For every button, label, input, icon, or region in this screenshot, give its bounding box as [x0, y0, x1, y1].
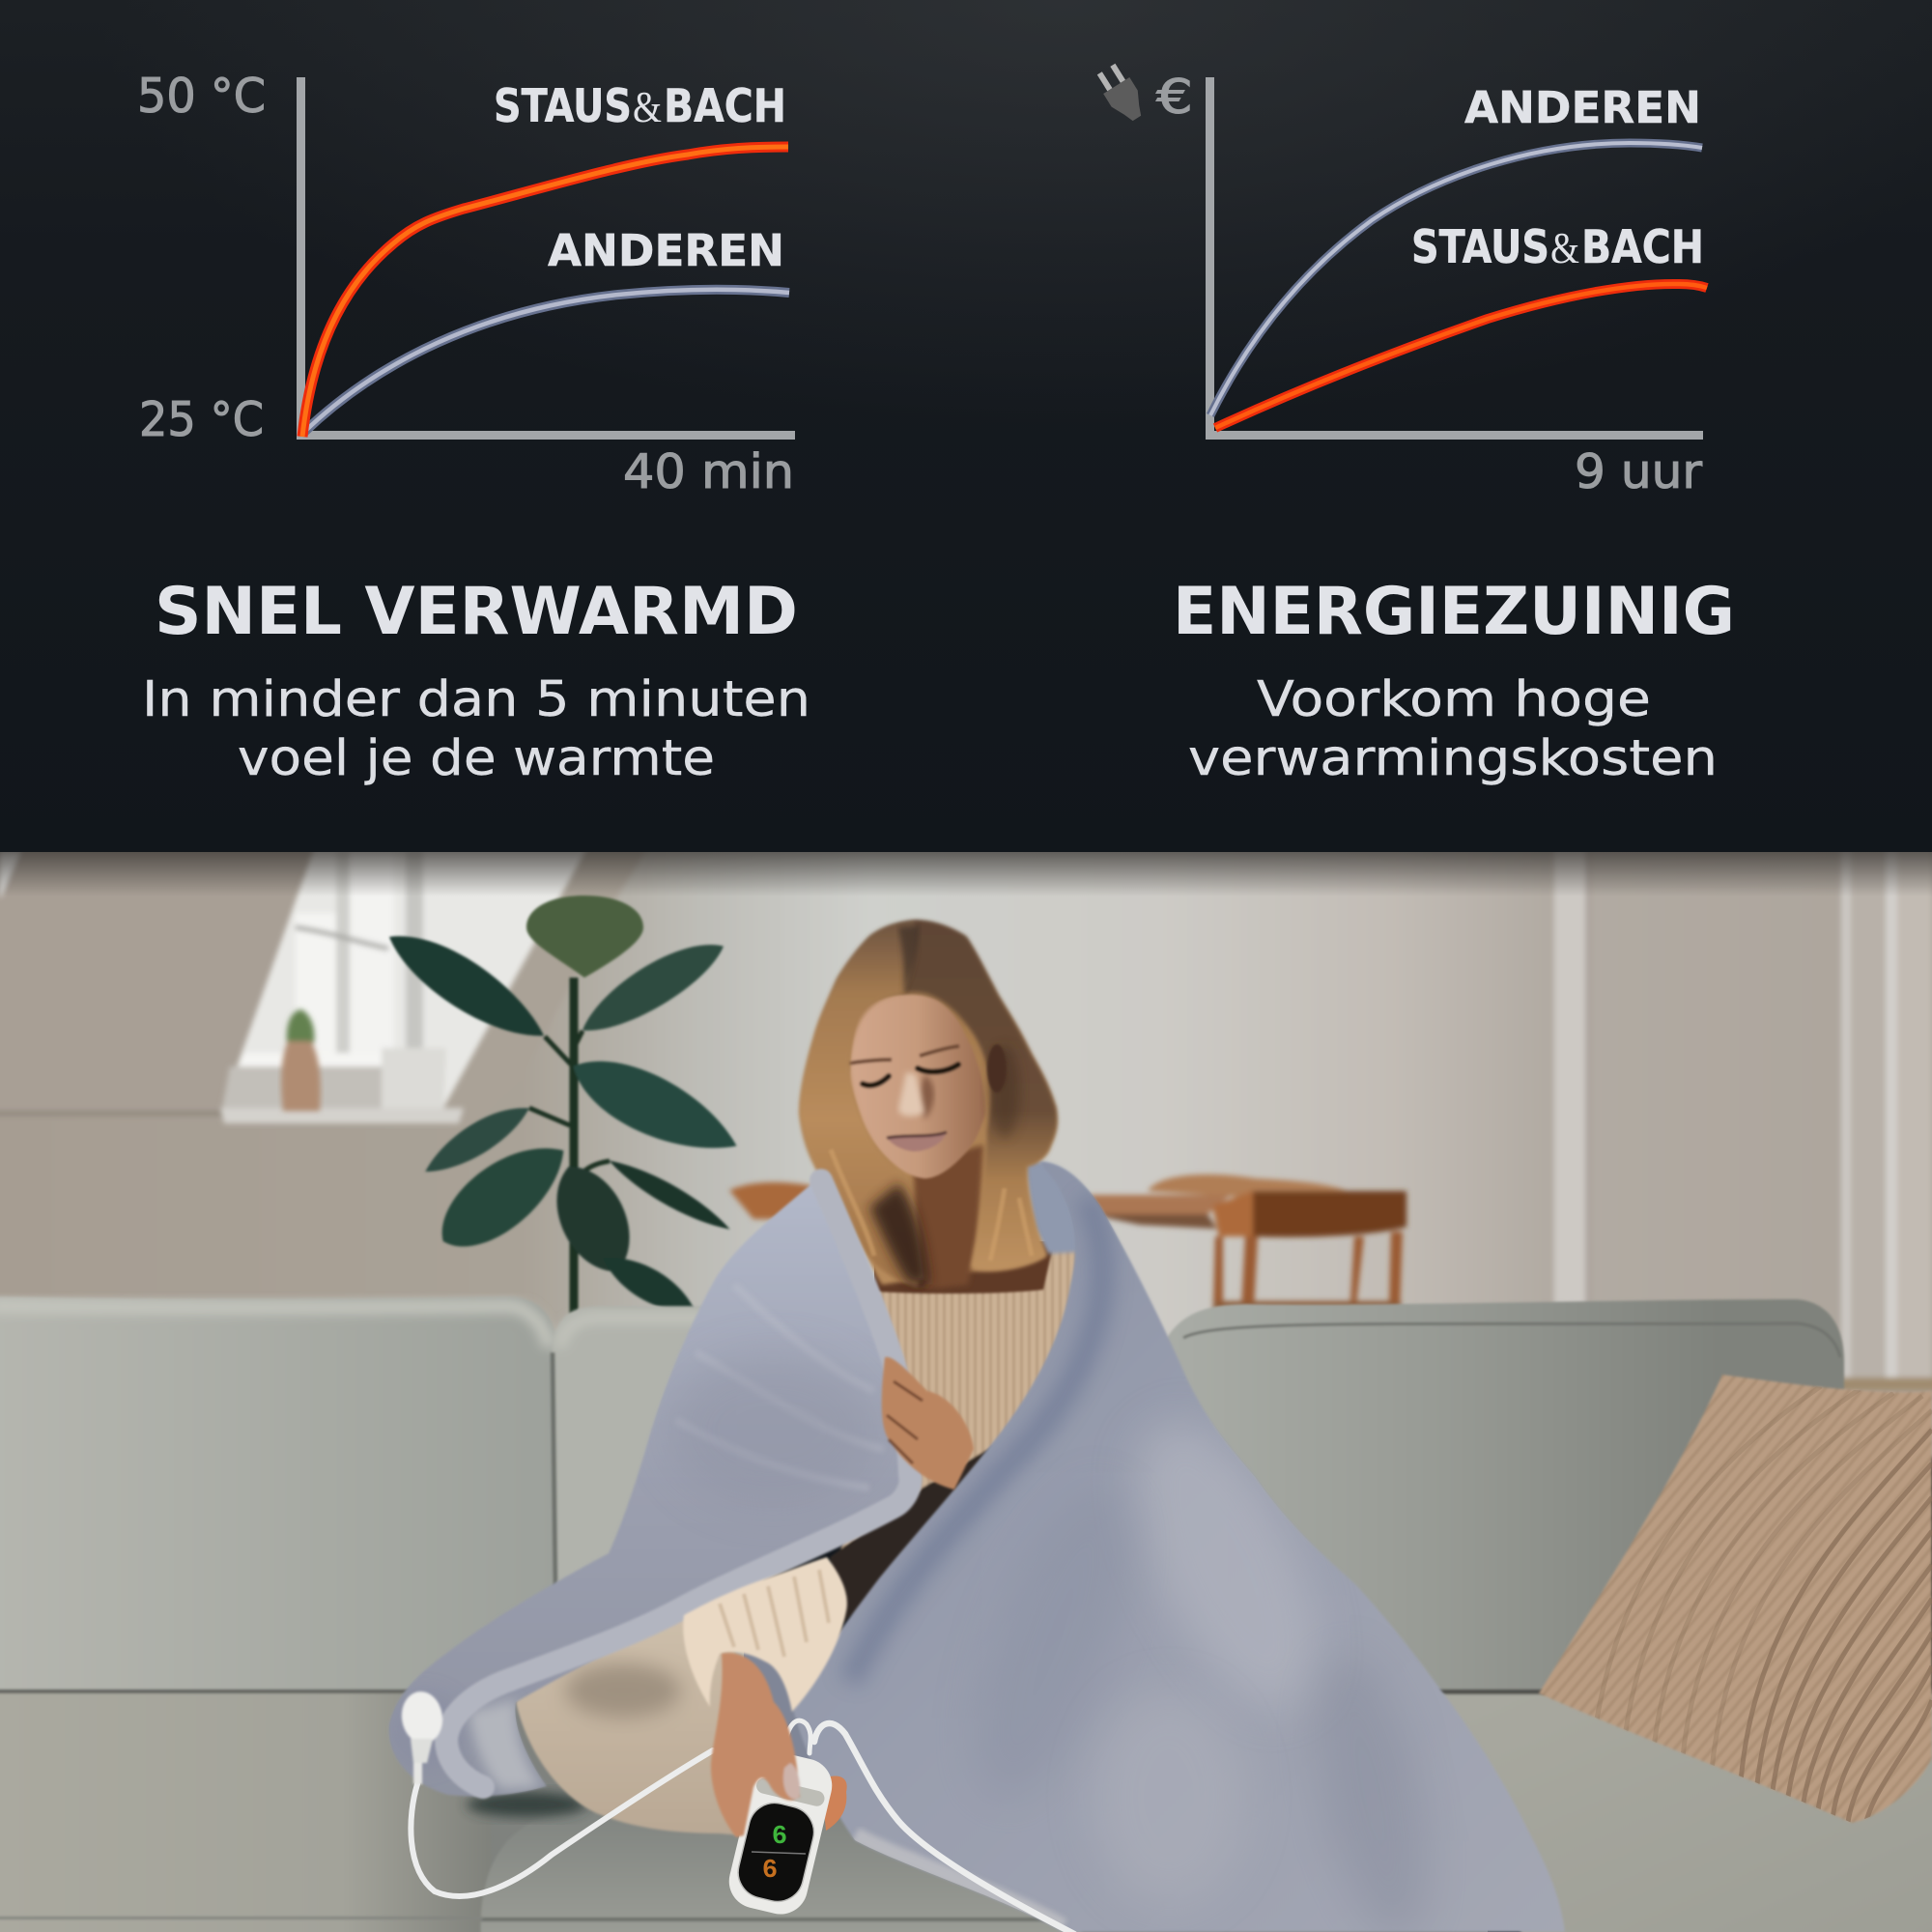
label: Anderen: ANDEREN	[1464, 82, 1701, 133]
cables	[411, 1720, 1074, 1932]
blanket connector	[398, 1689, 446, 1784]
x-axis label: 40 min	[623, 444, 794, 499]
face	[848, 994, 985, 1179]
label: Staus&Bach: BACH	[664, 80, 786, 133]
hand holding blanket	[882, 1357, 974, 1490]
room wall	[0, 840, 1932, 1459]
shadow under legs	[467, 1792, 586, 1817]
pillow	[1539, 1375, 1932, 1835]
blanket trim	[446, 1180, 911, 1787]
leaf: bottom	[595, 1244, 703, 1325]
hair shadows and highlights	[831, 925, 1032, 1285]
line: Anderen	[1210, 143, 1702, 415]
ear and hair shadow	[987, 1044, 1020, 1138]
axes	[297, 77, 795, 440]
text: heating description	[142, 671, 810, 787]
line: Anderen	[303, 290, 789, 433]
sofa base behind cushions	[464, 1671, 1488, 1932]
hand on remote	[711, 1653, 800, 1837]
line: Staus&Bach	[1215, 284, 1707, 428]
leaf: upper left	[388, 934, 545, 1037]
sweater	[830, 1246, 1087, 1623]
nose	[898, 1072, 924, 1116]
wall trim strips	[1554, 840, 1585, 1314]
cushion: left	[0, 1296, 557, 1700]
icon: plug	[1094, 61, 1150, 127]
sofa back cushions	[0, 1296, 1844, 1700]
y-axis label: euro: €	[1156, 70, 1193, 125]
sleeve cuff	[683, 1557, 847, 1712]
remote control	[724, 1747, 838, 1919]
label: Staus&Bach	[494, 80, 786, 133]
leaf: center	[540, 1153, 646, 1285]
chest	[874, 1241, 1053, 1301]
y-axis label top: 50 °C	[137, 69, 266, 124]
shadow under arm	[830, 1439, 1005, 1623]
windowsill	[220, 1108, 464, 1123]
leaf: narrow right	[604, 1151, 735, 1238]
leaf: top round	[526, 895, 643, 978]
photo: woman under heated blanket on sofa	[0, 840, 1932, 1932]
display green: 6	[772, 1823, 787, 1852]
leaf: upper right	[582, 943, 724, 1033]
panel: dark comparison section	[0, 0, 1932, 852]
blanket lining	[469, 1700, 541, 1789]
heading: energiezuinig: ENERGIEZUINIG	[1173, 574, 1735, 650]
top shadow	[0, 852, 1932, 896]
heading: snel verwarmd: SNEL VERWARMD	[155, 574, 798, 650]
leaf: middle right	[574, 1059, 738, 1150]
label: Staus&Bach: &	[633, 82, 662, 131]
neck	[913, 1145, 983, 1290]
label: Anderen: ANDEREN	[548, 225, 784, 276]
sofa seat cushions	[0, 1690, 1932, 1932]
line: Staus&Bach	[302, 147, 788, 437]
blanket: right body	[793, 1162, 1565, 1932]
closed eyes	[863, 1065, 958, 1086]
axes	[1206, 77, 1703, 440]
x-axis label: 9 uur	[1575, 444, 1703, 499]
cushion: middle	[553, 1306, 763, 1700]
blanket inner collar behind hair	[1024, 1161, 1096, 1254]
text: energy description	[1188, 671, 1718, 787]
hair strands	[800, 921, 1057, 1287]
blanket patch behind hand	[744, 1642, 811, 1768]
display orange: 6	[762, 1857, 778, 1886]
label: Staus&Bach: &	[1550, 223, 1579, 272]
leaf: middle left	[417, 1094, 537, 1184]
cheek shadow by nose	[920, 1074, 934, 1119]
chart: heating speed	[137, 69, 795, 499]
window	[220, 840, 591, 1123]
y-axis label bottom: 25 °C	[139, 392, 264, 447]
fingers behind remote	[821, 1776, 847, 1831]
hair base	[800, 921, 1057, 1285]
chart: energy cost	[1094, 61, 1707, 499]
eyebrows	[848, 1046, 959, 1064]
leaf: lower left	[423, 1124, 582, 1266]
label: Staus&Bach: STAUS	[1411, 221, 1549, 274]
text: energy description: verwarmingskosten	[1188, 730, 1718, 787]
lips	[887, 1132, 947, 1151]
blanket: left wing	[386, 1176, 915, 1797]
wooden table and chair	[729, 1175, 1406, 1312]
text: energy description: Voorkom hoge	[1257, 671, 1651, 728]
label: Staus&Bach: BACH	[1581, 221, 1704, 274]
cushion: right	[1159, 1299, 1844, 1700]
text: heating description: voel je de warmte	[238, 730, 715, 787]
rubber plant	[377, 895, 749, 1325]
label: Staus&Bach: STAUS	[494, 80, 632, 133]
potted plant on sill	[281, 1009, 321, 1111]
trousers	[516, 1618, 744, 1835]
text: heating description: In minder dan 5 minuten	[142, 671, 810, 728]
label: Staus&Bach	[1411, 221, 1704, 274]
